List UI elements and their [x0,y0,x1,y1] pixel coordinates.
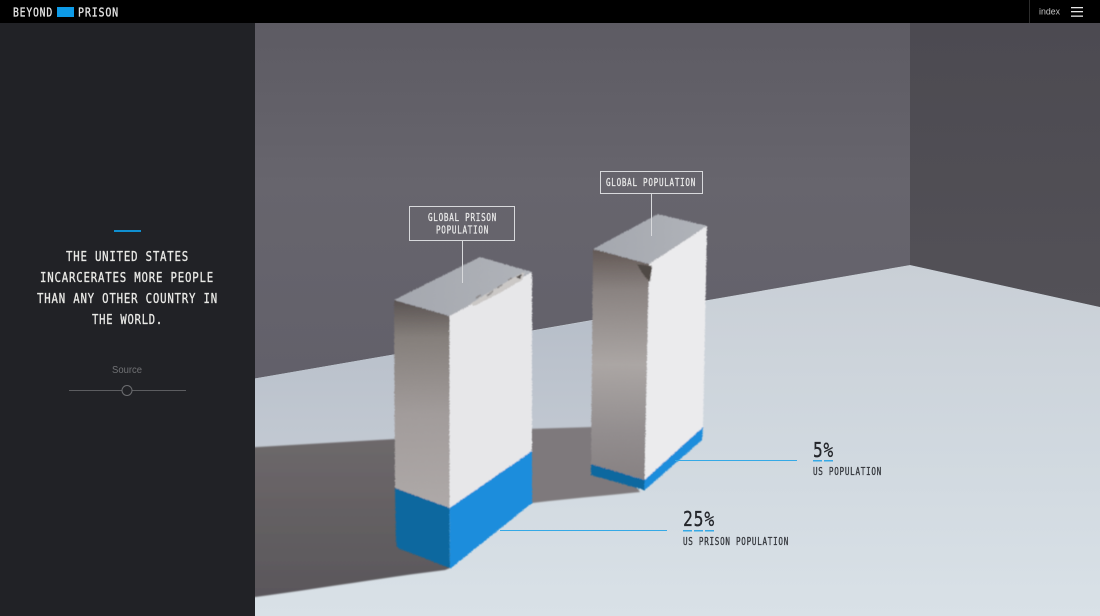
logo: BEYOND [13,4,53,20]
headline text: THE UNITED STATES [66,249,189,265]
callout: 25% US prison population: 25% [683,507,715,531]
logo [13,4,119,20]
callout: 25% US prison population [500,507,789,548]
photo panel: brick scene [240,23,1100,616]
headline text: INCARCERATES MORE PEOPLE [40,270,214,286]
shadow of small brick [525,427,640,504]
brick right face [644,226,707,480]
callout: 5% US population [675,438,882,478]
logo: PRISON [78,4,119,20]
chipped edge [470,272,525,306]
source slider [69,386,186,396]
label: global prison population: GLOBAL PRISON [428,212,497,224]
shadow of large brick [240,439,450,599]
floor [240,265,1100,616]
headline text [37,249,218,328]
brick right face [450,272,532,508]
small brick: global population [591,214,707,490]
brick top [593,214,707,264]
callout: 5% US population: US POPULATION [813,466,882,478]
blue paint right [644,427,703,490]
top navigation bar [0,0,1100,23]
lit floor behind bricks [240,302,700,449]
back wall [240,23,910,381]
brick top [394,257,532,316]
sidebar panel [0,23,255,616]
headline text: THE WORLD. [92,312,163,328]
right wall [910,23,1100,307]
index link: index [1039,6,1060,16]
chipped corner [637,264,652,282]
blue paint right [450,451,532,568]
label: global population: GLOBAL POPULATION [606,177,696,189]
large brick: global prison population [394,257,532,568]
label: global prison population: POPULATION [436,224,489,236]
headline text: THAN ANY OTHER COUNTRY IN [37,291,218,307]
brick left face [394,300,450,508]
blue paint left [591,464,644,490]
accent dash [114,230,141,232]
brick left face [591,249,649,480]
callout: 25% US prison population: US PRISON POPULATION [683,536,789,548]
icon: hamburger menu [1071,7,1083,17]
label: global prison population [410,206,514,283]
label: global population [600,172,702,236]
callout: 5% US population: 5% [813,438,834,462]
blue paint left [395,488,450,568]
source label: Source [112,365,142,376]
